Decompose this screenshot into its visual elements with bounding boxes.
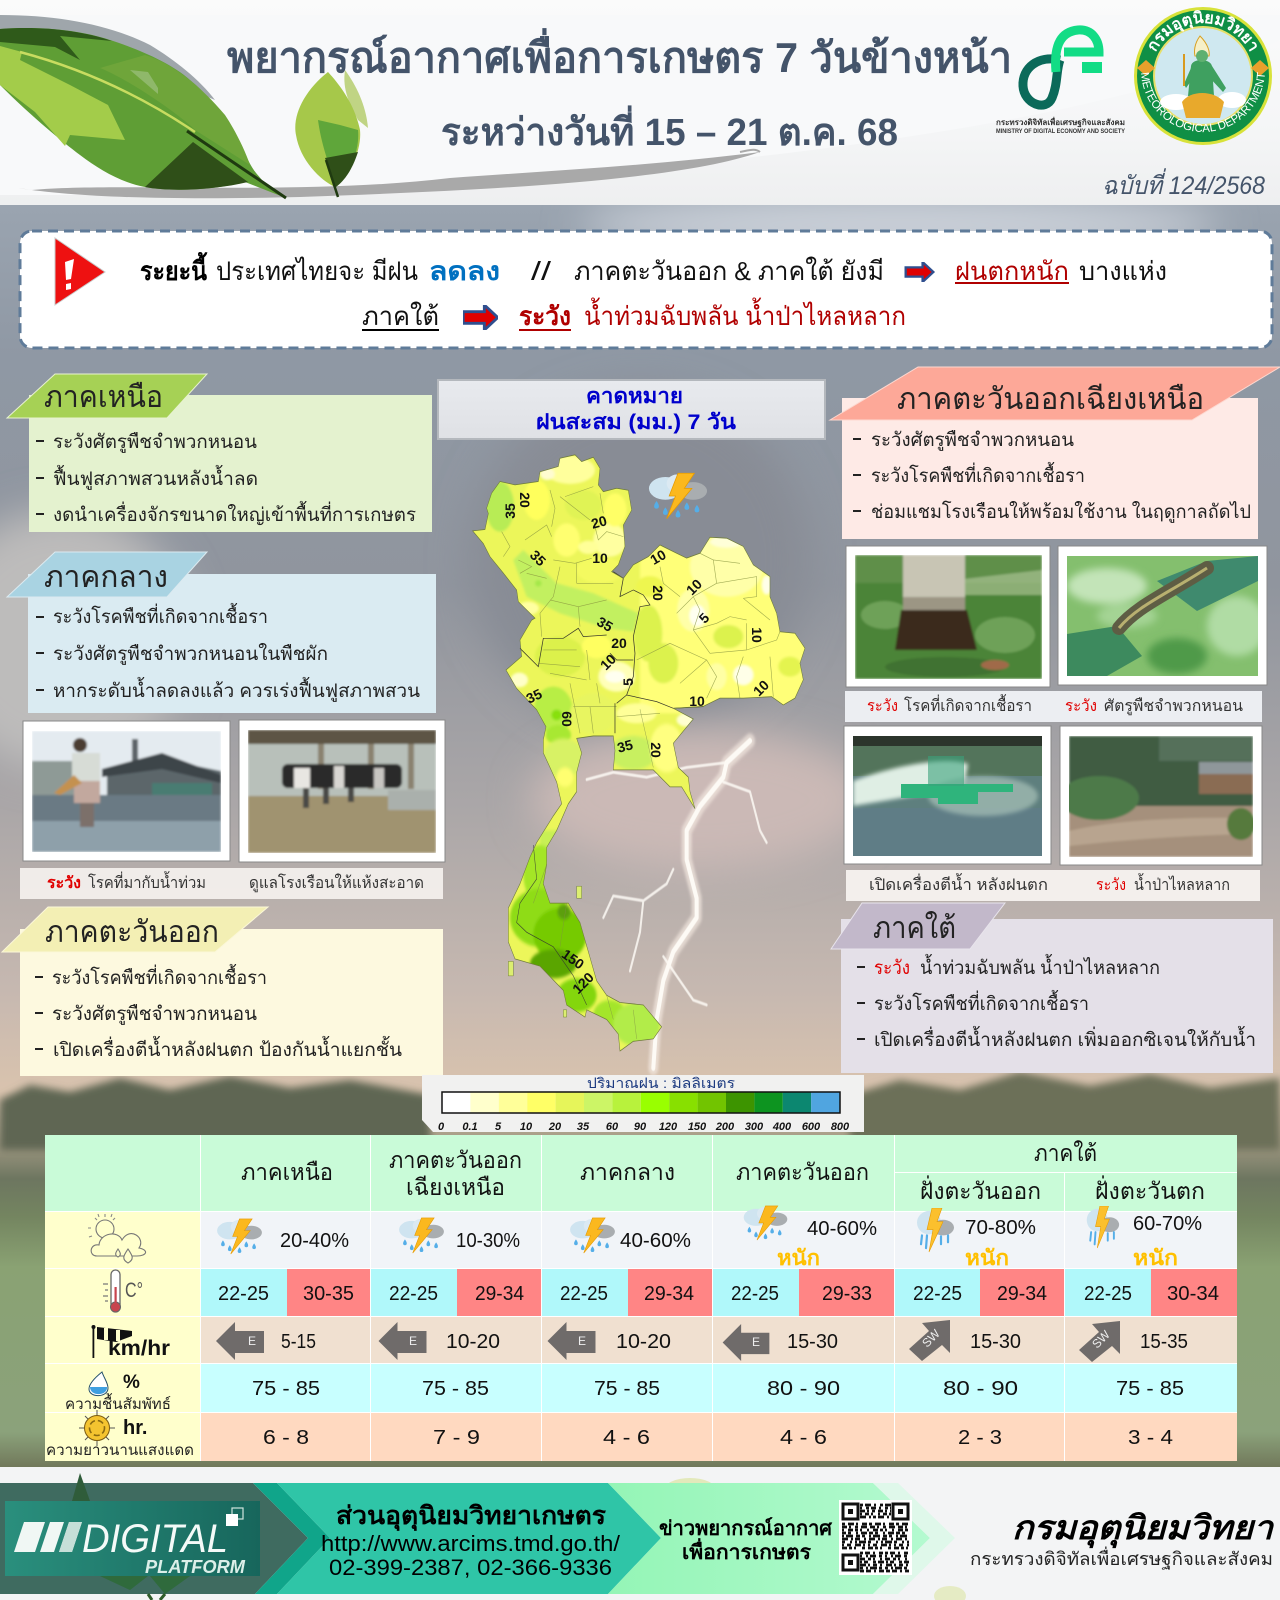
photo: clean cow barn <box>239 720 445 862</box>
icon: thermometer: C° <box>125 1279 143 1302</box>
map isohyet labels: 10 <box>597 651 619 673</box>
alert line 2 <box>362 297 906 331</box>
map isohyet labels: 35 <box>615 736 635 756</box>
background: storm sky and meadow <box>0 195 1280 1470</box>
alert line 1: ลดลง <box>429 256 500 286</box>
alert line 1 <box>140 251 1167 286</box>
caption strip: left photos <box>20 868 443 899</box>
subtitle: date range: ระหว่างวันที่ 15 – 21 ต.ค. 68 <box>441 105 898 154</box>
table row: wind: SW <box>1089 1327 1113 1351</box>
photo: water aerator <box>844 726 1051 864</box>
panel: alert banner <box>20 231 1272 348</box>
table header row: ภาคเหนือ <box>241 1159 333 1185</box>
legend: rainfall colour scale: 150 <box>688 1121 707 1133</box>
alert line 2: น้ำท่วมฉับพลัน น้ำป่าไหลหลาก <box>584 297 906 331</box>
table row: rain chance: 70-80% <box>965 1217 1036 1239</box>
table row: wind: 10-20 <box>446 1331 500 1353</box>
legend: rainfall colour scale: 90 <box>634 1121 647 1133</box>
table row: temperature <box>201 1269 1237 1316</box>
map isohyet labels: 10 <box>750 677 772 699</box>
table row: sunshine duration: 2 - 3 <box>958 1427 1002 1449</box>
table row: wind: E <box>752 1335 760 1349</box>
table row: temperature: 22-25 <box>731 1283 779 1305</box>
heading box: expected accumulated rainfall: ฝนสะสม (มม.) 7 วัน <box>536 411 737 434</box>
south advice list: ระวังโรคพืชที่เกิดจากเชื้อรา <box>874 990 1089 1015</box>
map isohyet labels: 10 <box>683 576 705 598</box>
legend: rainfall colour scale: 800 <box>831 1121 850 1133</box>
table row: temperature: 22-25 <box>1084 1283 1132 1305</box>
logo: meteorological department seal: กรมอุตุนิยมวิทยา <box>1149 10 1257 52</box>
heading: north <box>7 374 207 418</box>
title: พยากรณ์อากาศเพื่อการเกษตร 7 วันข้างหน้า <box>227 28 1012 81</box>
table row: wind: E <box>409 1334 417 1348</box>
table row: temperature: 29-34 <box>475 1283 524 1305</box>
panel: south region <box>831 903 1273 1073</box>
caption strip: right photos top: ระวัง <box>867 698 898 715</box>
map isohyet labels: 20 <box>650 585 666 601</box>
east advice list: เปิดเครื่องตีน้ำหลังฝนตก ป้องกันน้ำแยกชั้น <box>53 1036 402 1061</box>
table row: sunshine duration: 4 - 6 <box>780 1427 827 1449</box>
central advice list <box>36 603 420 702</box>
contact block: http://www.arcims.tmd.go.th/ <box>321 1531 621 1556</box>
department name: กระทรวงดิจิทัลเพื่อเศรษฐกิจและสังคม <box>970 1546 1273 1570</box>
department name: กรมอุตุนิยมวิทยา <box>1012 1509 1275 1549</box>
south advice list <box>857 954 1256 1051</box>
logo: digital platform <box>5 1501 260 1577</box>
table row: temperature: 22-25 <box>389 1283 438 1305</box>
table header row: ภาคกลาง <box>580 1159 675 1185</box>
table row: sunshine duration: 4 - 6 <box>603 1427 650 1449</box>
map isohyet labels: 5 <box>620 678 636 686</box>
caption strip: right photos bottom: น้ำป่าไหลหลาก <box>1134 873 1230 894</box>
heading: east <box>2 907 268 952</box>
legend: rainfall colour scale: 0 <box>438 1121 445 1133</box>
heading: south: ภาคใต้ <box>873 911 956 945</box>
table row: temperature: 22-25 <box>913 1283 962 1305</box>
map isohyet labels: 35 <box>502 503 518 519</box>
qr caption <box>659 1517 833 1564</box>
table row: temperature: 30-35 <box>303 1283 354 1305</box>
legend: rainfall colour scale: 0.1 <box>462 1121 478 1133</box>
contact block: ส่วนอุตุนิยมวิทยาเกษตร <box>336 1502 607 1532</box>
map isohyet labels: 20 <box>648 742 664 758</box>
table row: wind: 15-30 <box>787 1331 838 1353</box>
table: regional forecast <box>45 1135 1237 1461</box>
table row: wind <box>201 1317 1237 1363</box>
icon: humidity drop and label: % <box>123 1372 140 1393</box>
table row: relative humidity: 75 - 85 <box>252 1378 320 1400</box>
heading: northeast <box>830 367 1280 420</box>
caption strip: right photos top: ศัตรูพืชจำพวกหนอน <box>1104 697 1243 716</box>
icon: sun and label: hr. <box>123 1417 147 1439</box>
map isohyet labels: 10 <box>689 693 705 709</box>
icon: weather cloud outline <box>88 1214 146 1263</box>
panel: east region <box>2 907 443 1076</box>
legend: rainfall colour scale: 120 <box>659 1121 678 1133</box>
icon: small sprout leaf <box>295 70 368 197</box>
table row: wind: E <box>578 1334 586 1348</box>
map isohyet labels: 35 <box>527 547 549 569</box>
map isohyet labels <box>502 492 772 997</box>
panel: north region <box>7 374 432 532</box>
table row: relative humidity: 80 - 90 <box>943 1378 1018 1400</box>
photo: caterpillar on leaf <box>1058 546 1267 685</box>
table header row: เฉียงเหนือ <box>406 1174 505 1200</box>
logo: meteorological department seal <box>1134 7 1272 145</box>
icon: sun and label: ความยาวนานแสงแดด <box>46 1442 194 1459</box>
northeast advice list: ระวังศัตรูพืชจำพวกหนอน <box>871 430 1074 451</box>
south advice list: น้ำท่วมฉับพลัน น้ำป่าไหลหลาก <box>920 954 1160 979</box>
legend: rainfall colour scale: 60 <box>606 1121 619 1133</box>
caption strip: right photos bottom: ระวัง <box>1096 877 1126 894</box>
qr caption: เพื่อการเกษตร <box>682 1537 811 1564</box>
logo: ministry of digital economy <box>996 30 1125 135</box>
table header row: ฝั่งตะวันตก <box>1095 1175 1205 1204</box>
east advice list: ระวังโรคพืชที่เกิดจากเชื้อรา <box>52 964 267 989</box>
qr caption: ข่าวพยากรณ์อากาศ <box>659 1517 833 1540</box>
photo: tree trunk disease <box>846 546 1050 687</box>
table row: rain chance: 20-40% <box>280 1230 349 1252</box>
table row: wind: 15-30 <box>970 1331 1021 1353</box>
contact block: 02-399-2387, 02-366-9336 <box>329 1555 612 1580</box>
table row: temperature: 29-33 <box>822 1283 872 1305</box>
alert line 2: ภาคใต้ <box>362 301 439 331</box>
footer band <box>0 1467 1280 1600</box>
map isohyet labels: 5 <box>696 609 713 626</box>
panel: central region <box>7 552 436 713</box>
icon: qr code <box>839 1500 912 1575</box>
table row: sunshine duration: 6 - 8 <box>263 1427 309 1449</box>
logo: ministry of digital economy: MINISTRY OF DIGITAL ECONOMY AND SOCIETY <box>996 129 1125 135</box>
logo: digital platform: DIGITAL <box>82 1517 228 1561</box>
icon: large green leaf <box>0 15 286 198</box>
heading box: expected accumulated rainfall <box>438 380 825 439</box>
legend: rainfall colour scale <box>422 1075 864 1133</box>
heading: north: ภาคเหนือ <box>44 381 163 414</box>
legend: rainfall colour scale: 600 <box>802 1121 821 1133</box>
table row: rain chance: 10-30% <box>456 1230 520 1252</box>
table row: temperature: 29-34 <box>997 1283 1047 1305</box>
legend: rainfall colour scale: 35 <box>577 1121 590 1133</box>
alert line 1: ภาคตะวันออก & ภาคใต้ ยังมี <box>574 256 884 286</box>
caption strip: left photos: ระวัง <box>47 874 81 892</box>
legend: rainfall colour scale: 400 <box>772 1121 792 1133</box>
caption strip: left photos: ดูแลโรงเรือนให้แห้งสะอาด <box>249 873 424 893</box>
central advice list: ระวังโรคพืชที่เกิดจากเชื้อรา <box>53 603 268 628</box>
north advice list <box>36 432 416 526</box>
east advice list <box>35 964 402 1061</box>
table row: rain chance <box>201 1206 1237 1270</box>
table header row: ภาคตะวันออก <box>389 1147 522 1173</box>
table row: relative humidity <box>201 1364 1237 1412</box>
map isohyet labels: 10 <box>592 550 608 566</box>
table row: sunshine duration: 7 - 9 <box>433 1427 480 1449</box>
map isohyet labels: 120 <box>569 969 597 997</box>
north advice list: งดนำเครื่องจักรขนาดใหญ่เข้าพื้นที่การเกษตร <box>53 501 416 526</box>
table row: rain chance: หนัก <box>965 1247 1009 1270</box>
table row: rain chance: หนัก <box>777 1247 820 1270</box>
map isohyet labels: 150 <box>559 946 587 972</box>
heading: northeast: ภาคตะวันออกเฉียงเหนือ <box>897 383 1204 416</box>
map isohyet labels: 20 <box>589 512 609 532</box>
logo: ministry of digital economy: กระทรวงดิจิทัลเพื่อเศรษฐกิจและสังคม <box>996 116 1125 128</box>
legend: rainfall colour scale: 20 <box>548 1121 562 1133</box>
heading box: expected accumulated rainfall: คาดหมาย <box>586 385 683 408</box>
table row: temperature: 29-34 <box>644 1283 694 1305</box>
table row: temperature: 30-34 <box>1167 1283 1219 1305</box>
table row: rain chance: 40-60% <box>620 1230 691 1252</box>
south advice list: เปิดเครื่องตีน้ำหลังฝนตก เพิ่มออกซิเจนให้กับน้ำ <box>874 1026 1256 1051</box>
table row: relative humidity: 80 - 90 <box>767 1378 840 1400</box>
legend: rainfall colour scale: ปริมาณฝน : มิลลิเมตร <box>587 1075 736 1091</box>
table row: relative humidity: 75 - 85 <box>594 1378 660 1400</box>
legend: rainfall colour scale: 300 <box>745 1121 764 1133</box>
table row: sunshine duration <box>201 1413 1237 1461</box>
icon: wind sock and unit: km/hr <box>108 1337 170 1360</box>
table header row <box>45 1135 1237 1211</box>
caption strip: left photos: โรคที่มากับน้ำท่วม <box>88 871 206 892</box>
icon: thunderstorm cloud <box>649 473 707 519</box>
icon: warning triangle <box>55 238 105 305</box>
alert line 1: บางแห่ง <box>1079 256 1167 286</box>
contact block <box>321 1502 621 1580</box>
panel: northeast region <box>830 367 1280 539</box>
alert line 1: ฝนตกหนัก <box>955 256 1069 286</box>
table row: wind: 5-15 <box>281 1331 316 1353</box>
map isohyet labels: 35 <box>524 685 545 707</box>
icon: sun and label <box>46 1410 194 1459</box>
table header row: ภาคตะวันออก <box>736 1159 869 1185</box>
chart: thailand rainfall map <box>472 454 806 1052</box>
department name <box>970 1509 1275 1570</box>
photo: flash flood <box>1059 726 1262 865</box>
map isohyet labels: 10 <box>749 627 765 643</box>
heading: east: ภาคตะวันออก <box>45 916 219 949</box>
alert line 2: ระวัง <box>519 301 571 331</box>
caption strip: right photos top <box>845 691 1262 722</box>
table left column icons <box>45 1212 200 1461</box>
table row: rain chance: 60-70% <box>1133 1213 1202 1235</box>
caption strip: right photos top: ระวัง <box>1065 698 1097 715</box>
north advice list: ระวังศัตรูพืชจำพวกหนอน <box>53 432 257 453</box>
table row: rain chance: หนัก <box>1133 1247 1178 1270</box>
table row: wind: 10-20 <box>616 1331 671 1353</box>
caption strip: right photos bottom: เปิดเครื่องตีน้ำ หลังฝนตก <box>869 873 1048 894</box>
icon: wind sock and unit <box>92 1325 170 1360</box>
header banner <box>0 0 1280 205</box>
alert line 1: ระยะนี้ <box>140 251 208 286</box>
logo: meteorological department seal: METEOROLOGICAL DEPARTMENT <box>1141 72 1265 132</box>
table row: wind: E <box>248 1334 256 1348</box>
alert line 1: // <box>531 256 552 286</box>
heading: central <box>7 552 207 597</box>
map isohyet labels: 20 <box>517 492 533 508</box>
south advice list: ระวัง <box>874 958 910 979</box>
heading: central: ภาคกลาง <box>44 561 168 594</box>
legend: rainfall colour scale: 200 <box>715 1121 735 1133</box>
table row: sunshine duration: 3 - 4 <box>1128 1427 1173 1449</box>
table row: wind: SW <box>919 1326 943 1350</box>
icon: humidity drop and label: ความชื้นสัมพัทธ์ <box>65 1393 171 1413</box>
map isohyet labels: 10 <box>647 546 669 568</box>
table row: rain chance: 40-60% <box>807 1218 877 1240</box>
table row: relative humidity: 75 - 85 <box>1116 1378 1184 1400</box>
table header row: ภาคใต้ <box>1034 1140 1097 1166</box>
east advice list: ระวังศัตรูพืชจำพวกหนอน <box>52 1004 257 1025</box>
north advice list: ฟื้นฟูสภาพสวนหลังน้ำลด <box>53 465 258 490</box>
icon: humidity drop and label <box>65 1372 171 1413</box>
heading: south <box>831 903 1005 949</box>
alert line 1: ประเทศไทยจะ มีฝน <box>216 256 418 286</box>
table row: wind: 15-35 <box>1140 1331 1188 1353</box>
table row: temperature: 22-25 <box>560 1283 608 1305</box>
logo: digital platform: PLATFORM <box>145 1557 246 1577</box>
table row: temperature: 22-25 <box>218 1283 269 1305</box>
central advice list: ระวังศัตรูพืชจำพวกหนอนในพืชผัก <box>53 643 328 665</box>
northeast advice list: ช่อมแชมโรงเรือนให้พร้อมใช้งาน ในฤดูกาลถัดไป <box>871 500 1251 523</box>
caption strip: right photos bottom <box>846 870 1260 901</box>
northeast advice list <box>853 430 1251 523</box>
issue number: ฉบับที่ 124/2568 <box>1102 168 1265 200</box>
table header row: ฝั่งตะวันออก <box>920 1175 1041 1204</box>
table row: relative humidity: 75 - 85 <box>422 1378 489 1400</box>
northeast advice list: ระวังโรคพืชที่เกิดจากเชื้อรา <box>871 462 1085 487</box>
map isohyet labels: 35 <box>594 613 616 635</box>
lightning bolt <box>587 741 767 1068</box>
icon: thermometer <box>103 1270 143 1312</box>
central advice list: หากระดับน้ำลดลงแล้ว ควรเร่งฟื้นฟูสภาพสวน <box>53 677 420 702</box>
caption strip: right photos top: โรคที่เกิดจากเชื้อรา <box>904 694 1032 715</box>
map isohyet labels: 20 <box>611 635 627 651</box>
legend: rainfall colour scale: 5 <box>495 1121 502 1133</box>
legend: rainfall colour scale: 10 <box>520 1121 533 1133</box>
photo: flooded street <box>23 721 230 861</box>
map isohyet labels: 60 <box>559 711 575 727</box>
